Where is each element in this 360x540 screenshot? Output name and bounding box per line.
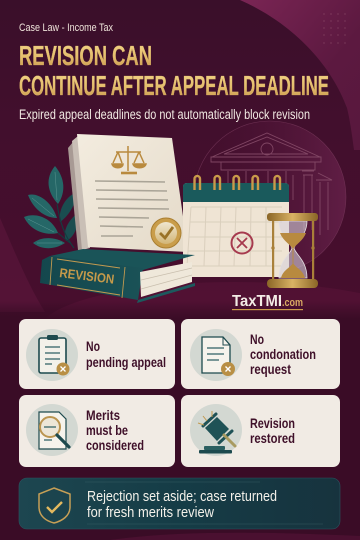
card text: request bbox=[250, 361, 291, 377]
illustration: hourglass bbox=[267, 213, 318, 288]
card text: condonation bbox=[250, 346, 316, 362]
card: revision restored bbox=[181, 395, 340, 467]
card text: No bbox=[86, 338, 100, 354]
icon: gavel bbox=[190, 404, 242, 456]
card text: No bbox=[250, 331, 264, 347]
icon: magnifier on document bbox=[26, 404, 78, 456]
icon: clipboard bbox=[26, 329, 78, 381]
brand logo: TaxTMI bbox=[232, 293, 282, 310]
card text: restored bbox=[250, 430, 295, 446]
title: REVISION CAN bbox=[19, 40, 152, 71]
banner text: for fresh merits review bbox=[87, 505, 214, 521]
icon: scales of justice bbox=[112, 146, 146, 173]
card text: pending appeal bbox=[86, 354, 166, 370]
illustration: courthouse bbox=[211, 133, 332, 235]
brand logo: .com bbox=[282, 297, 303, 309]
card text: Revision bbox=[250, 415, 295, 431]
card: no pending appeal bbox=[19, 319, 175, 389]
illustration: legal document bbox=[68, 134, 188, 252]
card: no condonation request bbox=[181, 319, 340, 389]
document text lines bbox=[95, 181, 169, 236]
illustration: book bbox=[40, 249, 195, 303]
icon: document with cross bbox=[190, 329, 242, 381]
icon: gold seal bbox=[151, 218, 181, 248]
conclusion banner bbox=[19, 478, 340, 529]
card: merits must be considered bbox=[19, 395, 175, 467]
banner text: Rejection set aside; case returned bbox=[87, 489, 277, 505]
calendar rings bbox=[194, 176, 280, 190]
illustration: calendar bbox=[183, 176, 289, 277]
illustration: leaves bbox=[24, 166, 78, 248]
illustration: book: REVISION bbox=[59, 265, 115, 287]
category label: Case Law - Income Tax bbox=[19, 22, 113, 34]
card text: considered bbox=[86, 437, 144, 453]
card text: Merits bbox=[86, 407, 120, 423]
icon: shield with check bbox=[39, 488, 70, 523]
card text: must be bbox=[86, 422, 128, 438]
calendar grid bbox=[187, 207, 282, 266]
title bbox=[19, 40, 329, 101]
icon: crossed date bbox=[232, 232, 252, 254]
